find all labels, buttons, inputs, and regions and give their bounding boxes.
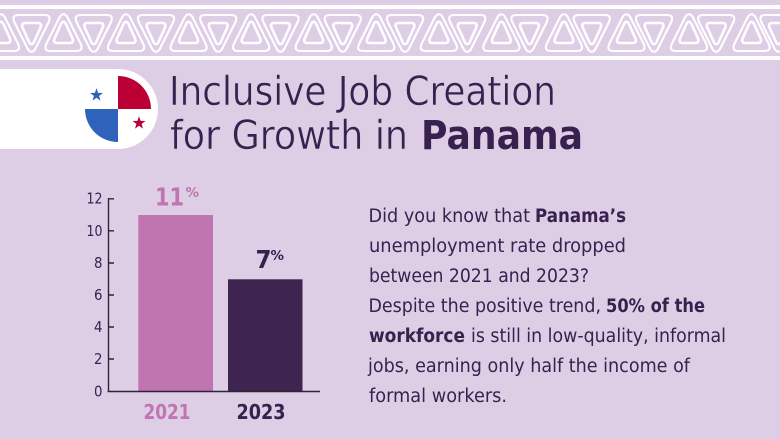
y-axis labels: 2 [94,350,102,368]
y-axis labels: 12 [86,190,102,208]
body text: 50% of the [606,296,705,317]
body text: Did you know that [368,206,530,227]
value label 7% [256,245,284,274]
decorative pattern band [0,5,780,60]
bar chart [86,182,320,424]
body text: jobs, earning only half the income of [367,356,690,377]
body text: Despite the positive trend, [368,296,601,317]
year label 2023: 2023 [236,400,286,424]
icon: red star [132,116,146,129]
y-axis labels: 6 [94,286,102,304]
y-axis labels [86,190,102,400]
bar 2023 [228,279,302,392]
value label 11%: % [186,186,199,201]
title: Panama [421,113,583,159]
value label 7%: % [270,249,284,264]
value label 11%: 11 [155,182,184,212]
title [169,69,583,159]
body text: between 2021 and 2023? [369,266,589,287]
year label 2021: 2021 [144,400,190,424]
body text: workforce [369,326,465,347]
body text: formal workers. [369,386,507,407]
body text: is still in low-quality, informal [471,326,726,347]
bar 2021 [138,215,213,392]
y-axis labels: 0 [94,382,102,400]
white flag panel [0,69,158,149]
body text [367,206,726,407]
icon: Panama flag [85,76,151,142]
title: for Growth in [170,113,408,159]
y-axis labels: 10 [86,222,102,240]
axes [108,198,320,392]
title: Inclusive Job Creation [169,69,556,115]
value label 7%: 7 [256,245,272,274]
y-axis labels: 4 [94,318,102,336]
body text: unemployment rate dropped [369,236,626,257]
body text: Panama’s [535,206,626,227]
y-axis labels: 8 [94,254,102,272]
icon: blue star [90,88,103,101]
